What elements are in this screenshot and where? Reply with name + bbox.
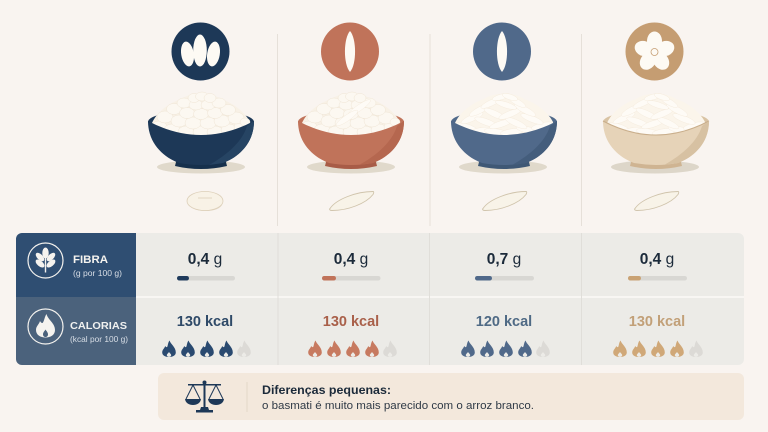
calorias value: column 2: 130 kcal xyxy=(323,314,379,330)
fibra value: column 3 xyxy=(475,251,534,280)
icon: flower xyxy=(626,22,684,80)
column dividers xyxy=(278,34,582,226)
calorias value: column 4: 130 kcal xyxy=(629,314,685,330)
icon: wheat xyxy=(28,243,63,278)
fibra value: column 3: 0,7 g xyxy=(487,251,521,268)
fibra value: column 1 xyxy=(177,251,235,280)
unit: calorias: (kcal por 100 g) xyxy=(70,334,128,344)
comparison table xyxy=(16,233,744,365)
fibra value: column 4 xyxy=(628,251,687,280)
column: round grain rice xyxy=(148,22,254,211)
row header: fibra xyxy=(16,233,136,297)
grain: jasmine xyxy=(635,192,679,210)
calorias value: column 3 xyxy=(461,314,550,357)
bowl with mixed rice xyxy=(298,92,404,174)
grain: round xyxy=(187,192,223,211)
column: long grain rice xyxy=(298,22,404,210)
label: fibra: FIBRA xyxy=(73,254,108,266)
bowl with pale rice xyxy=(603,92,709,174)
row header: calorias xyxy=(16,297,136,365)
unit: fibra: (g por 100 g) xyxy=(73,268,122,278)
grain: basmati xyxy=(483,192,527,210)
column: jasmine rice xyxy=(603,22,709,210)
icon: flame xyxy=(28,309,63,344)
icon: slender grain xyxy=(473,22,531,80)
calorias value: column 1: 130 kcal xyxy=(177,314,233,330)
fibra value: column 2 xyxy=(322,251,380,280)
fibra value: column 2: 0,4 g xyxy=(334,251,368,268)
column: basmati rice xyxy=(451,22,557,210)
calorias value: column 4 xyxy=(613,314,703,357)
bowl with long rice xyxy=(451,92,557,174)
fibra value: column 1: 0,4 g xyxy=(188,251,222,268)
icon: three round grains xyxy=(172,22,230,80)
bowl with round rice xyxy=(148,92,254,174)
grain: long xyxy=(330,192,374,210)
label: calorias: CALORIAS xyxy=(70,320,127,332)
callout xyxy=(158,373,744,420)
table background xyxy=(16,233,744,365)
callout heading: Diferenças pequenas: xyxy=(262,383,391,397)
calorias value: column 3: 120 kcal xyxy=(476,314,532,330)
calorias value: column 2 xyxy=(308,314,397,357)
fibra value: column 4: 0,4 g xyxy=(640,251,674,268)
calorias value: column 1 xyxy=(162,314,251,357)
callout background xyxy=(158,373,744,420)
icon: long grain xyxy=(321,22,379,80)
icon: balance scale xyxy=(185,380,224,412)
callout text: o basmati é muito mais parecido com o arroz branco. xyxy=(262,400,534,412)
